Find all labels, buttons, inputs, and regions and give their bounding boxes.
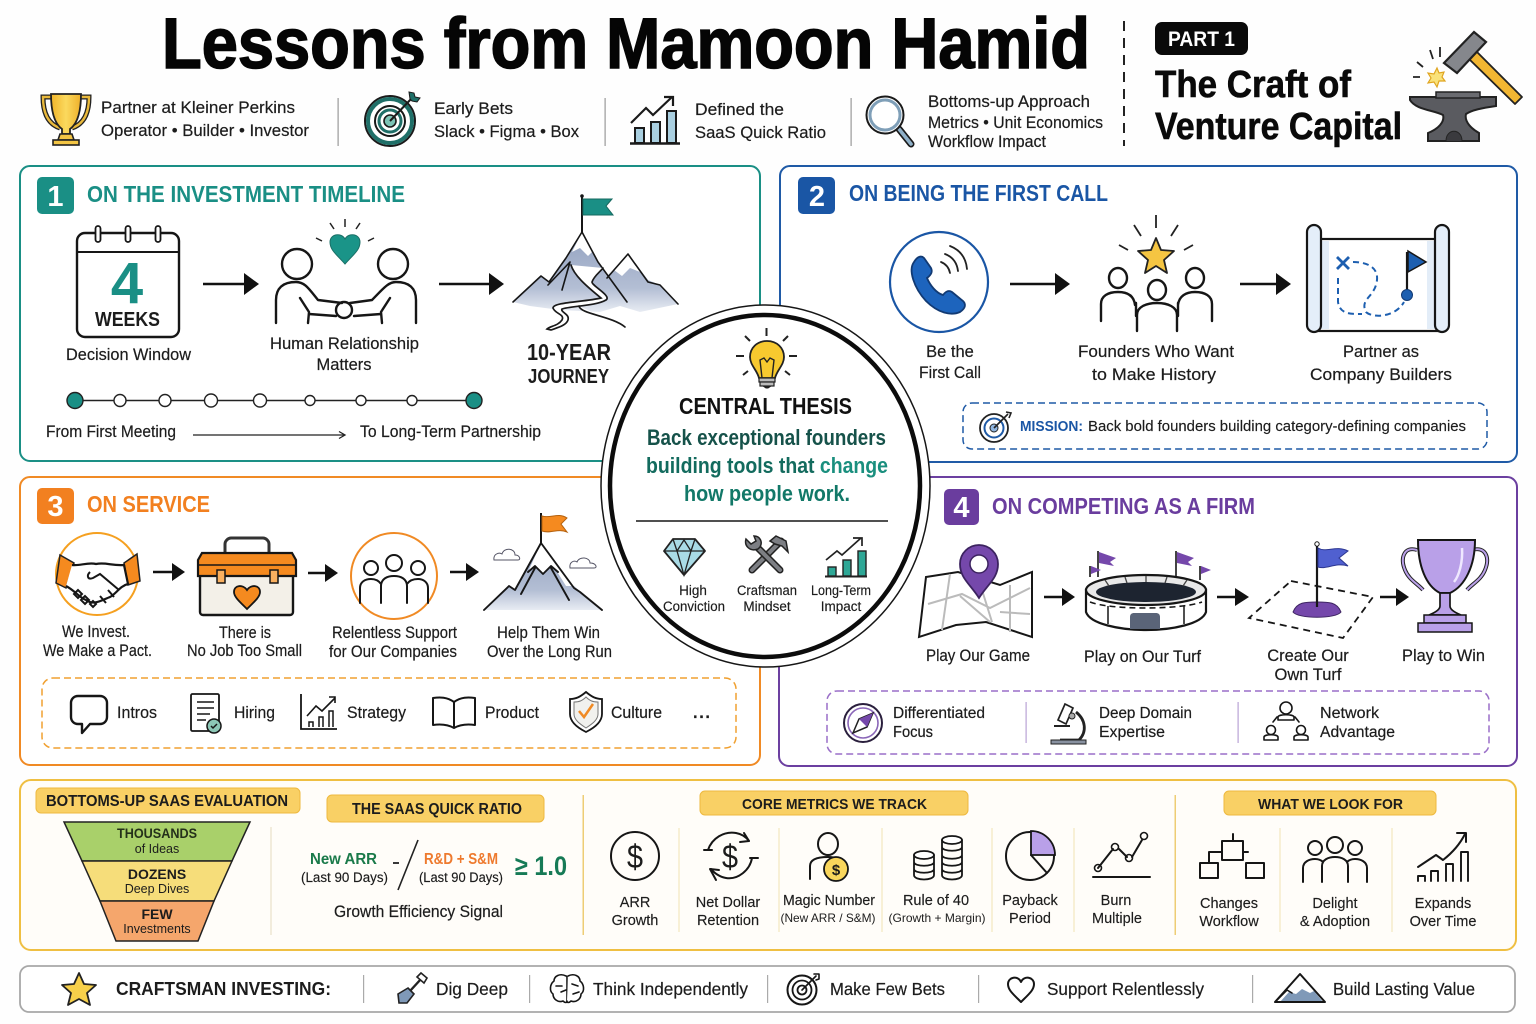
metric: burn multiple: Multiple [1092, 911, 1142, 927]
captions row: There is [219, 624, 271, 642]
pill: bottoms-up: BOTTOMS-UP SAAS EVALUATION [46, 793, 288, 810]
label network advantage: Network [1320, 705, 1379, 722]
icon: handshake with heart [276, 219, 416, 323]
pill: quick ratio [327, 795, 544, 822]
part 1 pill: PART 1 [1168, 28, 1235, 51]
heading 2: ON BEING THE FIRST CALL [849, 180, 1108, 206]
badge 1: 1 [47, 181, 64, 213]
title: Lessons from Mamoon Hamid [162, 5, 1090, 84]
metric: NDR [696, 833, 760, 929]
band dividers [363, 975, 1253, 1003]
label: be the first call: Be the [926, 343, 974, 361]
metric: magic number [780, 833, 876, 925]
label: long-term impact: Long-Term [811, 583, 871, 598]
fact: bottoms-up: Bottoms-up Approach [928, 93, 1090, 111]
badge 4 [944, 489, 979, 525]
subtitle: Venture Capital [1155, 106, 1402, 148]
icon: network [1264, 702, 1308, 740]
timeline caption: To Long-Term Partnership [360, 423, 541, 441]
label play our game: Play Our Game [926, 647, 1030, 665]
look-for: changes workflow: Workflow [1199, 914, 1259, 930]
icon: compass [844, 704, 882, 742]
label deep domain [1099, 705, 1192, 741]
label hiring: Hiring [234, 704, 275, 722]
metric: magic number: $ [832, 862, 841, 879]
subtitle: The Craft of [1155, 64, 1351, 106]
label: decision window: Decision Window [66, 346, 191, 364]
look-for: changes workflow [1199, 834, 1264, 930]
timeline caption: From First Meeting [46, 423, 176, 441]
label: rule of 40: Rule of 40 [903, 893, 969, 909]
metric dividers [678, 828, 1074, 932]
label: founders: to Make History [1092, 366, 1217, 384]
icon: diamond [664, 539, 705, 575]
look-for: changes workflow: Changes [1200, 896, 1258, 912]
label culture: Culture [611, 704, 662, 722]
icon: trophy [43, 94, 89, 145]
captions row: No Job Too Small [187, 642, 302, 660]
pill: bottoms-up [36, 788, 300, 813]
label intros: Intros [117, 704, 157, 722]
arrow [1380, 588, 1409, 606]
label strategy: Strategy [347, 704, 407, 722]
fact: early bets [434, 100, 580, 141]
icon: star [62, 973, 96, 1005]
badge 2: 2 [809, 181, 825, 213]
captions row: Over the Long Run [487, 643, 612, 661]
label: high conviction [663, 583, 725, 614]
metric: NDR: $ [722, 838, 738, 875]
label differentiated focus: Focus [893, 724, 933, 741]
central thesis circle [601, 305, 930, 667]
fact: bottoms-up: Metrics • Unit Economics [928, 114, 1103, 132]
metric: ARR: Growth [612, 913, 658, 929]
icon: phone [890, 232, 988, 332]
icon: turf flag [1249, 542, 1373, 638]
badge 1 [37, 177, 74, 214]
thesis statement [646, 425, 888, 506]
icon: mission target [980, 412, 1011, 442]
fact: bottoms-up [928, 93, 1103, 151]
icon: tools [746, 536, 788, 570]
icon: brain [550, 975, 584, 1002]
icon: target [365, 92, 420, 146]
label: 10-year journey: 10-YEAR [527, 339, 611, 365]
label: think independently: Think Independently [593, 979, 748, 999]
fact: partner: Partner at Kleiner Perkins [101, 99, 295, 117]
funnel: Investments [123, 922, 191, 936]
icon: shield [570, 692, 602, 732]
fact: early bets: Slack • Figma • Box [434, 123, 580, 141]
icon: calendar 4 weeks [77, 226, 179, 337]
metric: rule of 40 [914, 836, 962, 880]
timeline track [67, 392, 482, 408]
arrow [203, 273, 259, 295]
look-for: delight adoption: & Adoption [1300, 914, 1370, 930]
fact: quick ratio: Defined the [695, 101, 784, 119]
formula: quick ratio: ≥ 1.0 [515, 851, 567, 881]
metric: ARR [611, 832, 659, 929]
badge 2 [798, 177, 835, 214]
icon: shovel [398, 973, 427, 1003]
icon: hammer and anvil [1410, 32, 1522, 141]
label: growth efficiency: Growth Efficiency Signal [334, 903, 503, 921]
fact: partner: Operator • Builder • Investor [101, 122, 310, 140]
label network advantage: Advantage [1320, 724, 1395, 741]
metric: magic number: (New ARR / S&M) [780, 911, 876, 925]
metric: payback [1002, 831, 1059, 927]
label create our own turf [1267, 647, 1349, 684]
part 1 pill [1155, 22, 1248, 55]
icon: light bulb [736, 328, 797, 388]
label: dig deep: Dig Deep [436, 979, 508, 999]
thesis statement: how people work. [684, 481, 850, 506]
label: long-term impact: Impact [821, 599, 862, 614]
fact: bottoms-up: Workflow Impact [928, 133, 1046, 151]
icon: impact chart [825, 538, 867, 576]
label: 10-year journey: JOURNEY [528, 366, 610, 388]
metric: payback: Payback [1002, 893, 1059, 909]
fact: quick ratio [695, 101, 826, 142]
funnel: DOZENS [128, 866, 186, 882]
funnel [64, 822, 250, 941]
pill: core metrics: CORE METRICS WE TRACK [742, 796, 927, 813]
icon: handshake circle [56, 533, 140, 615]
icon: map scroll [1307, 225, 1449, 332]
label: build lasting value: Build Lasting Value [1333, 979, 1475, 999]
look-for: expands over time: Expands [1415, 896, 1471, 912]
label: be the first call [919, 343, 981, 382]
label: support relentlessly: Support Relentlessly [1047, 979, 1204, 999]
label: long-term impact [811, 583, 871, 614]
fact: quick ratio: SaaS Quick Ratio [695, 124, 826, 142]
badge 3 [37, 488, 74, 524]
mission callout [963, 403, 1487, 449]
label: 10-year journey [527, 339, 611, 388]
metric: NDR: Net Dollar [696, 895, 760, 911]
badge 3: 3 [47, 491, 64, 523]
icon: purple trophy [1403, 540, 1487, 632]
icon: calendar 4 weeks: WEEKS [95, 309, 160, 331]
arrow [1010, 273, 1070, 295]
mission callout: MISSION: [1020, 419, 1083, 435]
badge 4: 4 [953, 492, 970, 524]
captions row: We Invest. [62, 623, 130, 641]
label: human relationship: Human Relationship [270, 335, 419, 353]
heading 1: ON THE INVESTMENT TIMELINE [87, 181, 405, 207]
metric: ARR: $ [627, 838, 643, 875]
timeline caption [46, 423, 541, 441]
metric: NDR: Retention [697, 913, 759, 929]
panel 3: on service [20, 477, 760, 765]
dashed services box [42, 678, 736, 748]
label differentiated focus [893, 705, 985, 741]
arrow [153, 563, 185, 581]
funnel: of Ideas [135, 842, 179, 856]
label: rule of 40 [888, 893, 986, 925]
thesis heading: CENTRAL THESIS [679, 393, 852, 419]
thesis statement: building tools that change [646, 453, 888, 478]
label: high conviction: High [679, 583, 707, 598]
label product: Product [485, 704, 539, 722]
look-for: expands over time [1410, 833, 1476, 930]
subtitle [1155, 64, 1402, 148]
funnel: THOUSANDS [117, 825, 197, 841]
formula: quick ratio [301, 840, 567, 890]
metric: ARR: ARR [620, 895, 650, 911]
fact: partner [101, 99, 310, 140]
label: craftsman mindset: Craftsman [737, 583, 797, 598]
icon: target [788, 974, 819, 1004]
icon: mountain [1275, 974, 1325, 1002]
label: rule of 40: (Growth + Margin) [888, 911, 986, 925]
label network advantage [1320, 705, 1395, 741]
label play on our turf: Play on Our Turf [1084, 648, 1201, 666]
icon: mountain with orange flag [484, 513, 602, 610]
icon: stadium [1086, 551, 1211, 630]
pill: quick ratio: THE SAAS QUICK RATIO [352, 801, 522, 818]
captions row: We Make a Pact. [43, 642, 152, 660]
more dots: ... [693, 704, 710, 722]
icon: speech bubble [71, 696, 107, 733]
panel: saas evaluation [20, 780, 1516, 950]
formula: quick ratio: (Last 90 Days) [419, 870, 503, 885]
look-for: expands over time: Over Time [1410, 914, 1476, 930]
icon: calendar 4 weeks: 4 [111, 251, 143, 316]
label deep domain: Expertise [1099, 724, 1165, 741]
metric: burn multiple: Burn [1101, 893, 1131, 909]
icon: heart [1008, 978, 1034, 1002]
icon: mountain with flag [513, 194, 678, 330]
label: be the first call: First Call [919, 364, 981, 382]
label: high conviction: Conviction [663, 599, 725, 614]
metric: magic number: Magic Number [783, 893, 875, 909]
heading 4: ON COMPETING AS A FIRM [992, 493, 1255, 519]
label: partner as company builders: Company Builders [1310, 366, 1452, 384]
arrow [439, 273, 504, 295]
panel 4: competing as a firm [779, 477, 1517, 766]
captions row: for Our Companies [329, 643, 457, 661]
formula: quick ratio: R&D + S&M [424, 851, 498, 868]
label: founders [1078, 343, 1234, 384]
pill: core metrics [700, 791, 968, 815]
pill: what we look for: WHAT WE LOOK FOR [1258, 796, 1403, 813]
fact: early bets: Early Bets [434, 100, 513, 118]
icon: people circle [351, 533, 437, 619]
label differentiated focus: Differentiated [893, 705, 985, 722]
label: craftsman mindset [737, 583, 797, 614]
arrow [1044, 588, 1075, 606]
header facts row [43, 92, 1103, 151]
captions row [43, 623, 612, 661]
icon: growth chart [630, 97, 680, 144]
heading 3: ON SERVICE [87, 491, 210, 517]
panel 1: investment timeline [20, 166, 760, 461]
funnel: FEW [141, 906, 173, 922]
look-for dividers [1280, 828, 1392, 932]
mission callout: Back bold founders building category-defining companies [1088, 419, 1466, 435]
arrow [1217, 588, 1249, 606]
look-for: delight adoption [1300, 837, 1370, 930]
label create our own turf: Create Our [1267, 647, 1349, 665]
formula: quick ratio: (Last 90 Days) [301, 870, 388, 885]
icon: book [433, 697, 475, 728]
label: partner as company builders: Partner as [1343, 343, 1419, 361]
thesis statement: Back exceptional founders [647, 425, 886, 450]
label: make few bets: Make Few Bets [830, 979, 945, 999]
formula: quick ratio: New ARR [310, 851, 377, 868]
captions row: Help Them Win [497, 624, 600, 642]
label: human relationship: Matters [316, 356, 372, 374]
icon: map with pin [919, 545, 1032, 637]
icon: resume [191, 694, 221, 733]
band title: CRAFTSMAN INVESTING: [116, 979, 331, 999]
label: craftsman mindset: Mindset [743, 599, 791, 614]
label: founders: Founders Who Want [1078, 343, 1234, 361]
arrow [308, 564, 338, 582]
metric: payback: Period [1009, 911, 1051, 927]
icon: toolbox [198, 538, 296, 615]
arrow [450, 563, 479, 581]
label: human relationship [270, 335, 419, 374]
band: craftsman investing [20, 966, 1515, 1012]
metric: burn multiple [1092, 832, 1150, 927]
label create our own turf: Own Turf [1275, 666, 1342, 684]
icon: founders with star [1101, 215, 1212, 331]
label: partner as company builders [1310, 343, 1452, 384]
panel 2: first call [780, 166, 1517, 462]
arrow [1240, 273, 1291, 295]
icon: strategy chart [301, 694, 337, 729]
captions row: Relentless Support [332, 624, 457, 642]
dashed advantages box [827, 691, 1489, 754]
funnel: Deep Dives [125, 882, 189, 896]
label play to win: Play to Win [1402, 647, 1485, 665]
label deep domain: Deep Domain [1099, 705, 1192, 722]
pill: what we look for [1224, 791, 1436, 815]
icon: magnifier [866, 96, 911, 144]
look-for: delight adoption: Delight [1312, 896, 1358, 912]
icon: microscope [1051, 704, 1086, 744]
